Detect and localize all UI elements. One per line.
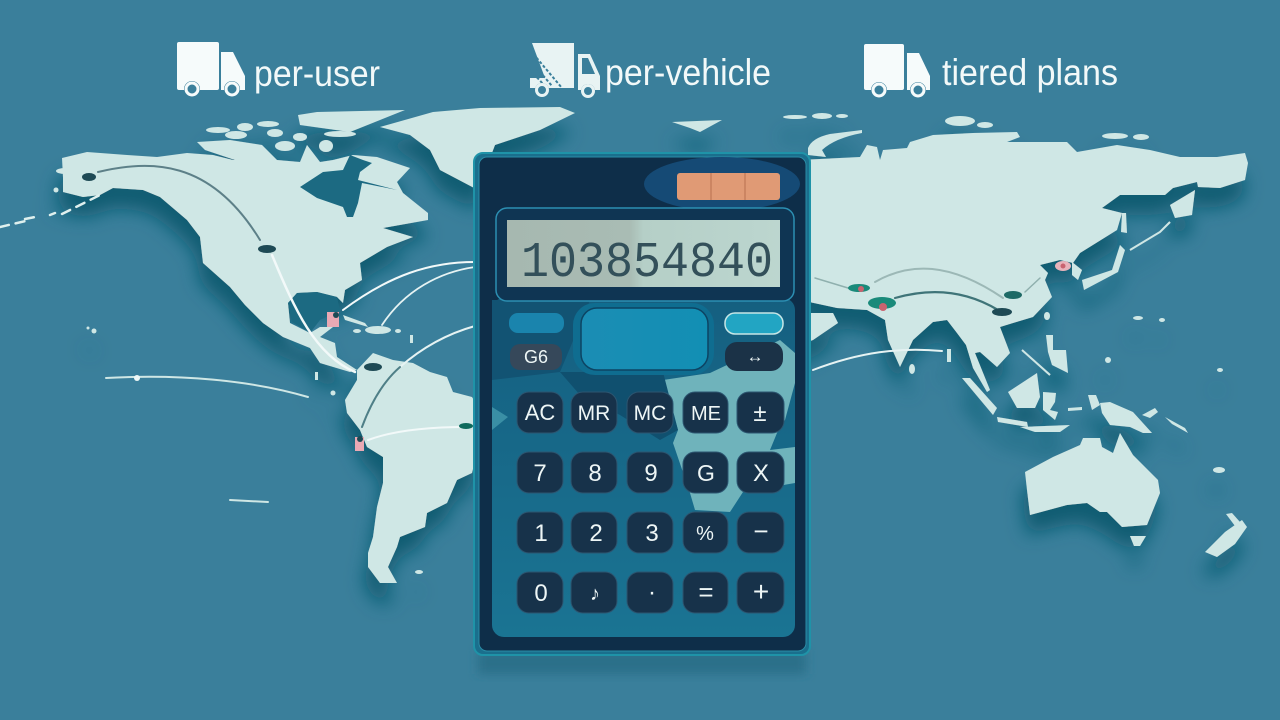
icon: truck bbox=[177, 42, 245, 97]
pricing option: tiered plans bbox=[864, 44, 1118, 98]
New Zealand bbox=[1205, 520, 1247, 557]
key row 1: MC bbox=[634, 402, 666, 425]
key row 3 bbox=[517, 512, 784, 553]
key row 2: 9 bbox=[644, 460, 658, 487]
function buttons: G6 bbox=[524, 347, 548, 367]
key row 4: ♪ bbox=[590, 583, 600, 605]
key row 2: X bbox=[753, 460, 769, 487]
key row 3: % bbox=[696, 523, 714, 545]
display: 103854840 bbox=[521, 235, 773, 292]
key row 3: − bbox=[753, 516, 769, 546]
key row 2: 7 bbox=[533, 460, 547, 487]
continent: Australia bbox=[1025, 433, 1160, 527]
continent: North America bbox=[62, 145, 428, 372]
key row 2: G bbox=[697, 460, 715, 486]
Arabia bbox=[800, 313, 838, 345]
route markers bbox=[82, 173, 1071, 451]
Hudson Bay bbox=[300, 155, 397, 217]
key row 4: · bbox=[648, 579, 656, 606]
world map bbox=[54, 107, 1248, 583]
key row 2 bbox=[517, 452, 784, 493]
calculator body bbox=[474, 153, 810, 655]
small Pacific islands bbox=[54, 188, 423, 574]
key row 3: 3 bbox=[645, 520, 659, 547]
continent: Eurasia bbox=[800, 132, 1248, 392]
translucent map inside calculator bbox=[492, 157, 800, 512]
Caribbean islands bbox=[343, 315, 413, 343]
function buttons bbox=[509, 303, 783, 375]
calculator shadow bbox=[478, 650, 806, 674]
calculator key face bbox=[492, 298, 795, 637]
Russian arctic islands bbox=[672, 113, 1149, 157]
Southeast Asia islands bbox=[909, 312, 1225, 473]
key row 4: 0 bbox=[534, 580, 548, 607]
display bbox=[496, 208, 794, 301]
keypad bbox=[517, 392, 784, 613]
key row 1 bbox=[517, 392, 784, 433]
Tasmania bbox=[1130, 536, 1146, 546]
solar panel bbox=[677, 173, 780, 200]
icon: truck bbox=[864, 44, 930, 98]
key row 4: = bbox=[698, 577, 714, 607]
label: tiered plans bbox=[942, 52, 1118, 93]
Japan and Kamchatka islands bbox=[1072, 190, 1195, 290]
arctic islands bbox=[56, 110, 405, 174]
key row 1: AC bbox=[525, 400, 555, 425]
route arcs bbox=[0, 166, 1040, 502]
label: per-user bbox=[254, 53, 380, 94]
label: per-vehicle bbox=[605, 52, 771, 93]
calculator bbox=[474, 153, 810, 655]
key row 4: + bbox=[753, 576, 769, 607]
function buttons: ↔ bbox=[746, 347, 764, 366]
key row 4 bbox=[517, 572, 784, 613]
key row 1: MR bbox=[578, 402, 610, 425]
pricing option: per-user bbox=[177, 42, 380, 97]
continent: South America bbox=[345, 353, 480, 583]
continent: Greenland bbox=[380, 107, 575, 190]
key row 1: ± bbox=[753, 400, 767, 427]
Gulf of Mexico bbox=[288, 292, 340, 333]
icon: truck bbox=[530, 43, 600, 98]
key row 3: 2 bbox=[589, 520, 603, 547]
key row 3: 1 bbox=[534, 520, 548, 547]
key row 1: ME bbox=[691, 403, 721, 425]
key row 2: 8 bbox=[588, 460, 602, 487]
pricing option: per-vehicle bbox=[530, 43, 771, 98]
